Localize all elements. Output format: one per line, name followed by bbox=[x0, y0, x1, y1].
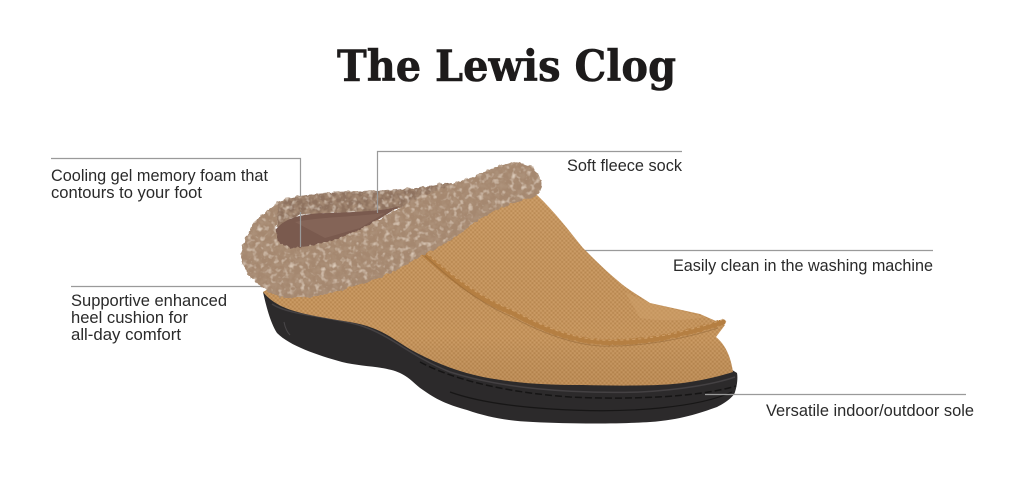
callout: heel cushion: heel cushion for bbox=[71, 309, 188, 327]
callout: sole: Versatile indoor/outdoor sole bbox=[766, 402, 974, 420]
title: The Lewis Clog bbox=[337, 42, 676, 92]
clog illustration bbox=[241, 162, 737, 424]
moc toe seam bbox=[422, 252, 723, 342]
callout: gel memory foam bbox=[51, 167, 268, 202]
toe highlight bbox=[625, 292, 705, 320]
fleece front collar bbox=[241, 162, 541, 298]
callout: fleece sock: Soft fleece sock bbox=[567, 157, 683, 175]
fleece back collar bbox=[276, 182, 452, 228]
upper body bbox=[263, 190, 733, 386]
inner lining bbox=[273, 206, 400, 250]
callout: heel cushion: Supportive enhanced bbox=[71, 292, 227, 310]
callout: gel memory foam: Cooling gel memory foam that bbox=[51, 167, 268, 185]
leader lines over the lining bbox=[300, 190, 378, 247]
callout: heel cushion bbox=[71, 292, 227, 344]
leader lines behind the clog bbox=[51, 152, 933, 286]
callout: gel memory foam: contours to your foot bbox=[51, 184, 202, 202]
callout: washing machine: Easily clean in the washing machine bbox=[673, 257, 933, 275]
callout: heel cushion: all-day comfort bbox=[71, 326, 181, 344]
seam shadow bbox=[425, 256, 718, 346]
leader line: sole bbox=[705, 394, 966, 396]
sole bbox=[263, 285, 737, 424]
